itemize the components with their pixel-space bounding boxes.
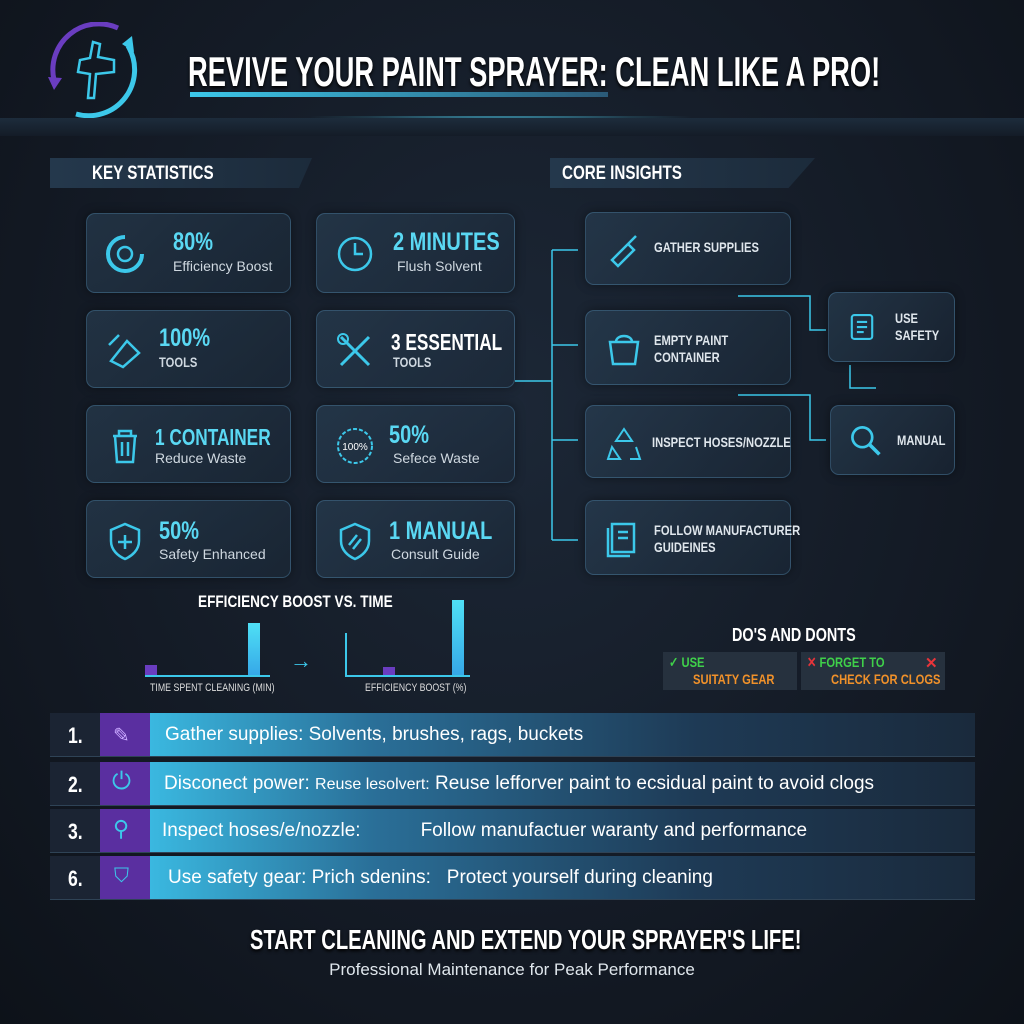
insight: follow guidelines: FOLLOW MANUFACTURER — [654, 522, 800, 538]
heading: key statistics: KEY STATISTICS — [92, 163, 214, 184]
step 3: Inspect hoses/e/nozzle: Follow manufactuer waranty and performance — [162, 820, 807, 841]
step 6: Use safety gear: Prich sdenins: Protect yourself during cleaning — [168, 867, 713, 888]
do's and donts: DO'S AND DONTS — [732, 625, 856, 645]
stat: 100% tools — [86, 310, 291, 388]
stat: 1 container: 1 CONTAINER — [155, 424, 271, 450]
stat: 50% safety — [86, 500, 291, 578]
insight: use safety: SAFETY — [895, 327, 939, 343]
insight: inspect hoses: INSPECT HOSES/NOZZLE — [652, 434, 791, 450]
stat: 3 essential tools: TOOLS — [393, 354, 431, 370]
step 6 — [50, 856, 975, 900]
heading: core insights — [550, 158, 815, 188]
step list — [50, 713, 975, 900]
do's and donts — [663, 625, 945, 690]
stat: 100% tools: TOOLS — [159, 354, 197, 370]
stat: 2 minutes: 2 MINUTES — [393, 228, 500, 256]
stat: 3 essential tools — [316, 310, 515, 388]
step 2 — [50, 762, 975, 806]
step 3 — [50, 809, 975, 853]
insight: follow guidelines: GUIDEINES — [654, 539, 716, 555]
step 2: 2. — [68, 772, 83, 797]
stat: 80% efficiency: Efficiency Boost — [173, 258, 272, 274]
insight: empty paint container: CONTAINER — [654, 349, 720, 365]
step 6: ⛉ — [114, 865, 129, 887]
heading: key statistics — [50, 158, 312, 188]
stat: 50% waste: 100% — [342, 442, 368, 453]
do's and donts: CHECK FOR CLOGS — [831, 671, 941, 687]
step 3: ⚲ — [113, 816, 129, 841]
step 1 — [50, 713, 975, 757]
step 3: 3. — [68, 819, 83, 844]
connector lines — [515, 249, 876, 541]
chart: efficiency boost vs time: EFFICIENCY BOOST (%) — [365, 682, 466, 694]
step 1: ✎ — [113, 725, 130, 747]
stat: 2 minutes — [316, 213, 515, 293]
stat: 50% waste: Sefece Waste — [393, 450, 480, 466]
stat: 1 container: Reduce Waste — [155, 450, 246, 466]
stat: 50% waste — [316, 405, 515, 483]
insight: inspect hoses — [585, 405, 791, 478]
chart: efficiency boost vs time: EFFICIENCY BOOST VS. TIME — [198, 592, 393, 611]
step 1: Gather supplies: Solvents, brushes, rags, buckets — [165, 724, 583, 745]
insight: use safety: USE — [895, 310, 918, 326]
stat: 100% tools: 100% — [159, 324, 210, 352]
footer call to action: START CLEANING AND EXTEND YOUR SPRAYER'S LIFE! — [250, 924, 801, 955]
title underline — [190, 92, 608, 97]
stat: 1 manual — [316, 500, 515, 578]
step 1: 1. — [68, 723, 83, 748]
insight: gather supplies: GATHER SUPPLIES — [654, 239, 759, 255]
stat: 80% efficiency: 80% — [173, 228, 213, 256]
step 2: Disconect power: Reuse lesolvert: Reuse lefforver paint to ecsidual paint to avoid clogs — [164, 773, 874, 794]
stat: 1 manual: Consult Guide — [391, 546, 480, 562]
step 6: 6. — [68, 866, 83, 891]
do's and donts: SUITATY GEAR — [693, 671, 775, 687]
title: REVIVE YOUR PAINT SPRAYER: CLEAN LIKE A PRO! — [188, 48, 880, 95]
footer subtitle: Professional Maintenance for Peak Performance — [329, 960, 695, 979]
heading: core insights: CORE INSIGHTS — [562, 163, 682, 184]
do's and donts: ✕ — [925, 655, 938, 672]
stat: 80% efficiency — [86, 213, 291, 293]
stat: 1 manual: 1 MANUAL — [389, 517, 492, 545]
insight: gather supplies — [585, 212, 791, 285]
insight: manual: MANUAL — [897, 432, 946, 448]
do's and donts: ✓ USE — [669, 654, 705, 670]
stat: 2 minutes: Flush Solvent — [397, 258, 482, 274]
step 2: ⏻ — [112, 768, 131, 795]
chart: efficiency boost vs time — [145, 592, 470, 694]
chart: efficiency boost vs time: → — [290, 648, 312, 673]
do's and donts: ✕ FORGET TO — [807, 654, 885, 670]
insight: empty paint container: EMPTY PAINT — [654, 332, 728, 348]
insight: use safety — [828, 292, 955, 362]
chart: efficiency boost vs time: TIME SPENT CLEANING (MIN) — [150, 682, 275, 694]
insight: empty paint container — [585, 310, 791, 385]
stat: 50% safety: 50% — [159, 517, 199, 545]
stat: 1 container — [86, 405, 291, 483]
stat: 50% waste: 50% — [389, 421, 429, 449]
stat: 50% safety: Safety Enhanced — [159, 546, 266, 562]
stat: 3 essential tools: 3 ESSENTIAL — [391, 329, 502, 355]
insight: manual — [830, 405, 955, 475]
insight: follow guidelines — [585, 500, 791, 575]
icon: spray gun cycle — [48, 22, 138, 118]
